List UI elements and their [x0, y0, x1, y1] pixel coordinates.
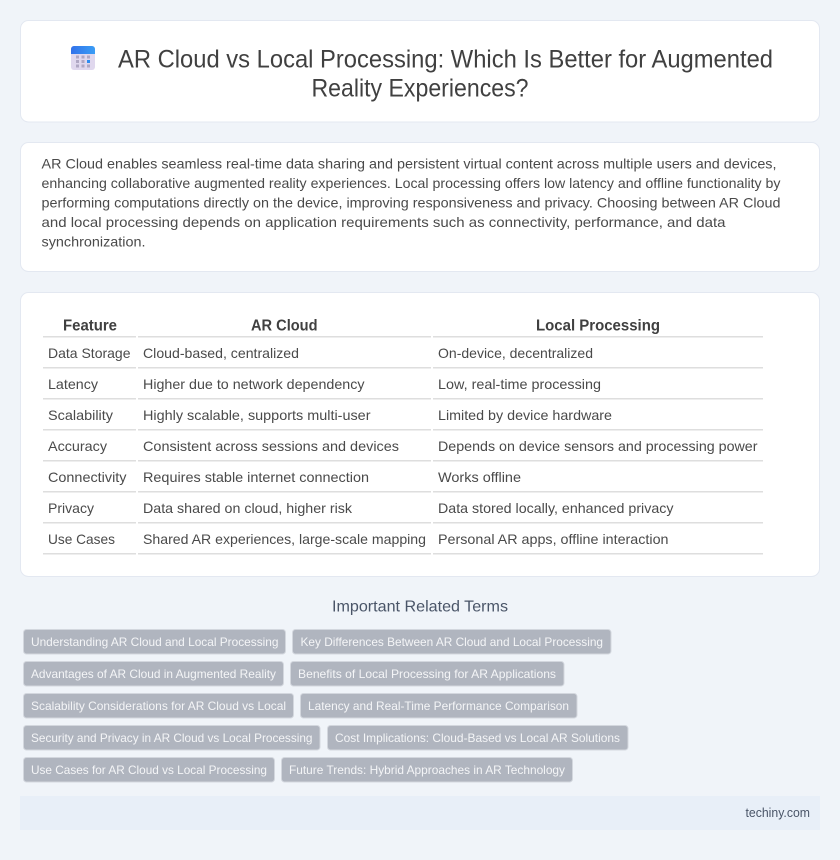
tag: [328, 726, 628, 750]
title: AR Cloud vs Local Processing: Which Is Better for Augmented: [118, 46, 773, 74]
intro paragraph: AR Cloud enables seamless real-time data sharing and persistent virtual content across multiple users and devices,: [42, 155, 776, 171]
row: latency: Low, real-time processing: [438, 376, 601, 392]
footer: [20, 796, 820, 830]
row: latency: Latency: [48, 376, 98, 392]
row: scalability: Limited by device hardware: [438, 407, 612, 423]
row: use cases: Use Cases: [48, 531, 115, 547]
row: privacy: Data shared on cloud, higher risk: [143, 500, 353, 516]
tag: Scalability Considerations for AR Cloud vs Local: [31, 699, 286, 713]
row: accuracy: [48, 438, 758, 454]
table header: [63, 318, 660, 334]
row: privacy: [48, 500, 674, 516]
intro paragraph: and local processing depends on application requirements such as connectivity, performance, and data: [42, 214, 726, 230]
tag: [24, 630, 286, 654]
icon: calendar grid: [71, 46, 95, 70]
row: privacy: Privacy: [48, 500, 94, 516]
tag: [24, 694, 294, 718]
intro paragraph: synchronization.: [42, 234, 146, 250]
row: accuracy: Accuracy: [48, 438, 107, 454]
tag: Key Differences Between AR Cloud and Local Processing: [300, 635, 603, 649]
tag: [282, 758, 572, 782]
heading: important related terms: Important Related Terms: [332, 598, 508, 616]
row: scalability: [48, 407, 612, 423]
row: connectivity: Connectivity: [48, 469, 126, 485]
row: accuracy: Consistent across sessions and devices: [143, 438, 399, 454]
tag: Benefits of Local Processing for AR Applications: [298, 667, 556, 681]
intro paragraph: enhancing collaborative augmented reality experiences. Local processing offers low latency and offline functionality by: [42, 175, 780, 191]
panel: title card: [20, 20, 820, 122]
row: latency: Higher due to network dependency: [143, 376, 364, 392]
row: privacy: Data stored locally, enhanced privacy: [438, 500, 674, 516]
row: latency: [48, 376, 601, 392]
tag: [300, 694, 577, 718]
table header: AR Cloud: [251, 318, 318, 334]
row: accuracy: Depends on device sensors and processing power: [438, 438, 758, 454]
tag: Advantages of AR Cloud in Augmented Reality: [31, 667, 276, 681]
row: connectivity: Works offline: [438, 469, 521, 485]
tag: Security and Privacy in AR Cloud vs Local Processing: [31, 731, 312, 745]
title: Reality Experiences?: [312, 74, 528, 102]
table header: Feature: [63, 318, 117, 334]
row: data storage: On-device, decentralized: [438, 345, 593, 361]
row: use cases: Personal AR apps, offline interaction: [438, 531, 668, 547]
row: data storage: Data Storage: [48, 345, 131, 361]
tag: [24, 758, 274, 782]
tag: [24, 726, 320, 750]
intro paragraph: performing computations directly on the device, improving responsiveness and privacy. Choosing between AR Cloud: [42, 194, 780, 210]
row: data storage: Cloud-based, centralized: [143, 345, 299, 361]
panel: comparison table card: [20, 292, 820, 576]
row: connectivity: Requires stable internet connection: [143, 469, 369, 485]
row: use cases: Shared AR experiences, large-scale mapping: [143, 531, 426, 547]
footer brand: techiny.com: [746, 805, 810, 820]
tag: [24, 662, 284, 686]
tag: Cost Implications: Cloud-Based vs Local AR Solutions: [335, 731, 620, 745]
table header: Local Processing: [536, 318, 660, 334]
row: scalability: Scalability: [48, 407, 113, 423]
tag: [290, 662, 564, 686]
tag: Latency and Real-Time Performance Comparison: [308, 699, 569, 713]
row: use cases: [48, 531, 668, 547]
tag list: [24, 630, 628, 782]
tag: [292, 630, 611, 654]
tag: Future Trends: Hybrid Approaches in AR Technology: [289, 763, 565, 777]
tag: Use Cases for AR Cloud vs Local Processing: [31, 763, 267, 777]
panel: intro text card: [20, 142, 820, 272]
row: scalability: Highly scalable, supports multi-user: [143, 407, 371, 423]
row: data storage: [48, 345, 593, 361]
tag: Understanding AR Cloud and Local Processing: [31, 635, 278, 649]
row: connectivity: [48, 469, 521, 485]
